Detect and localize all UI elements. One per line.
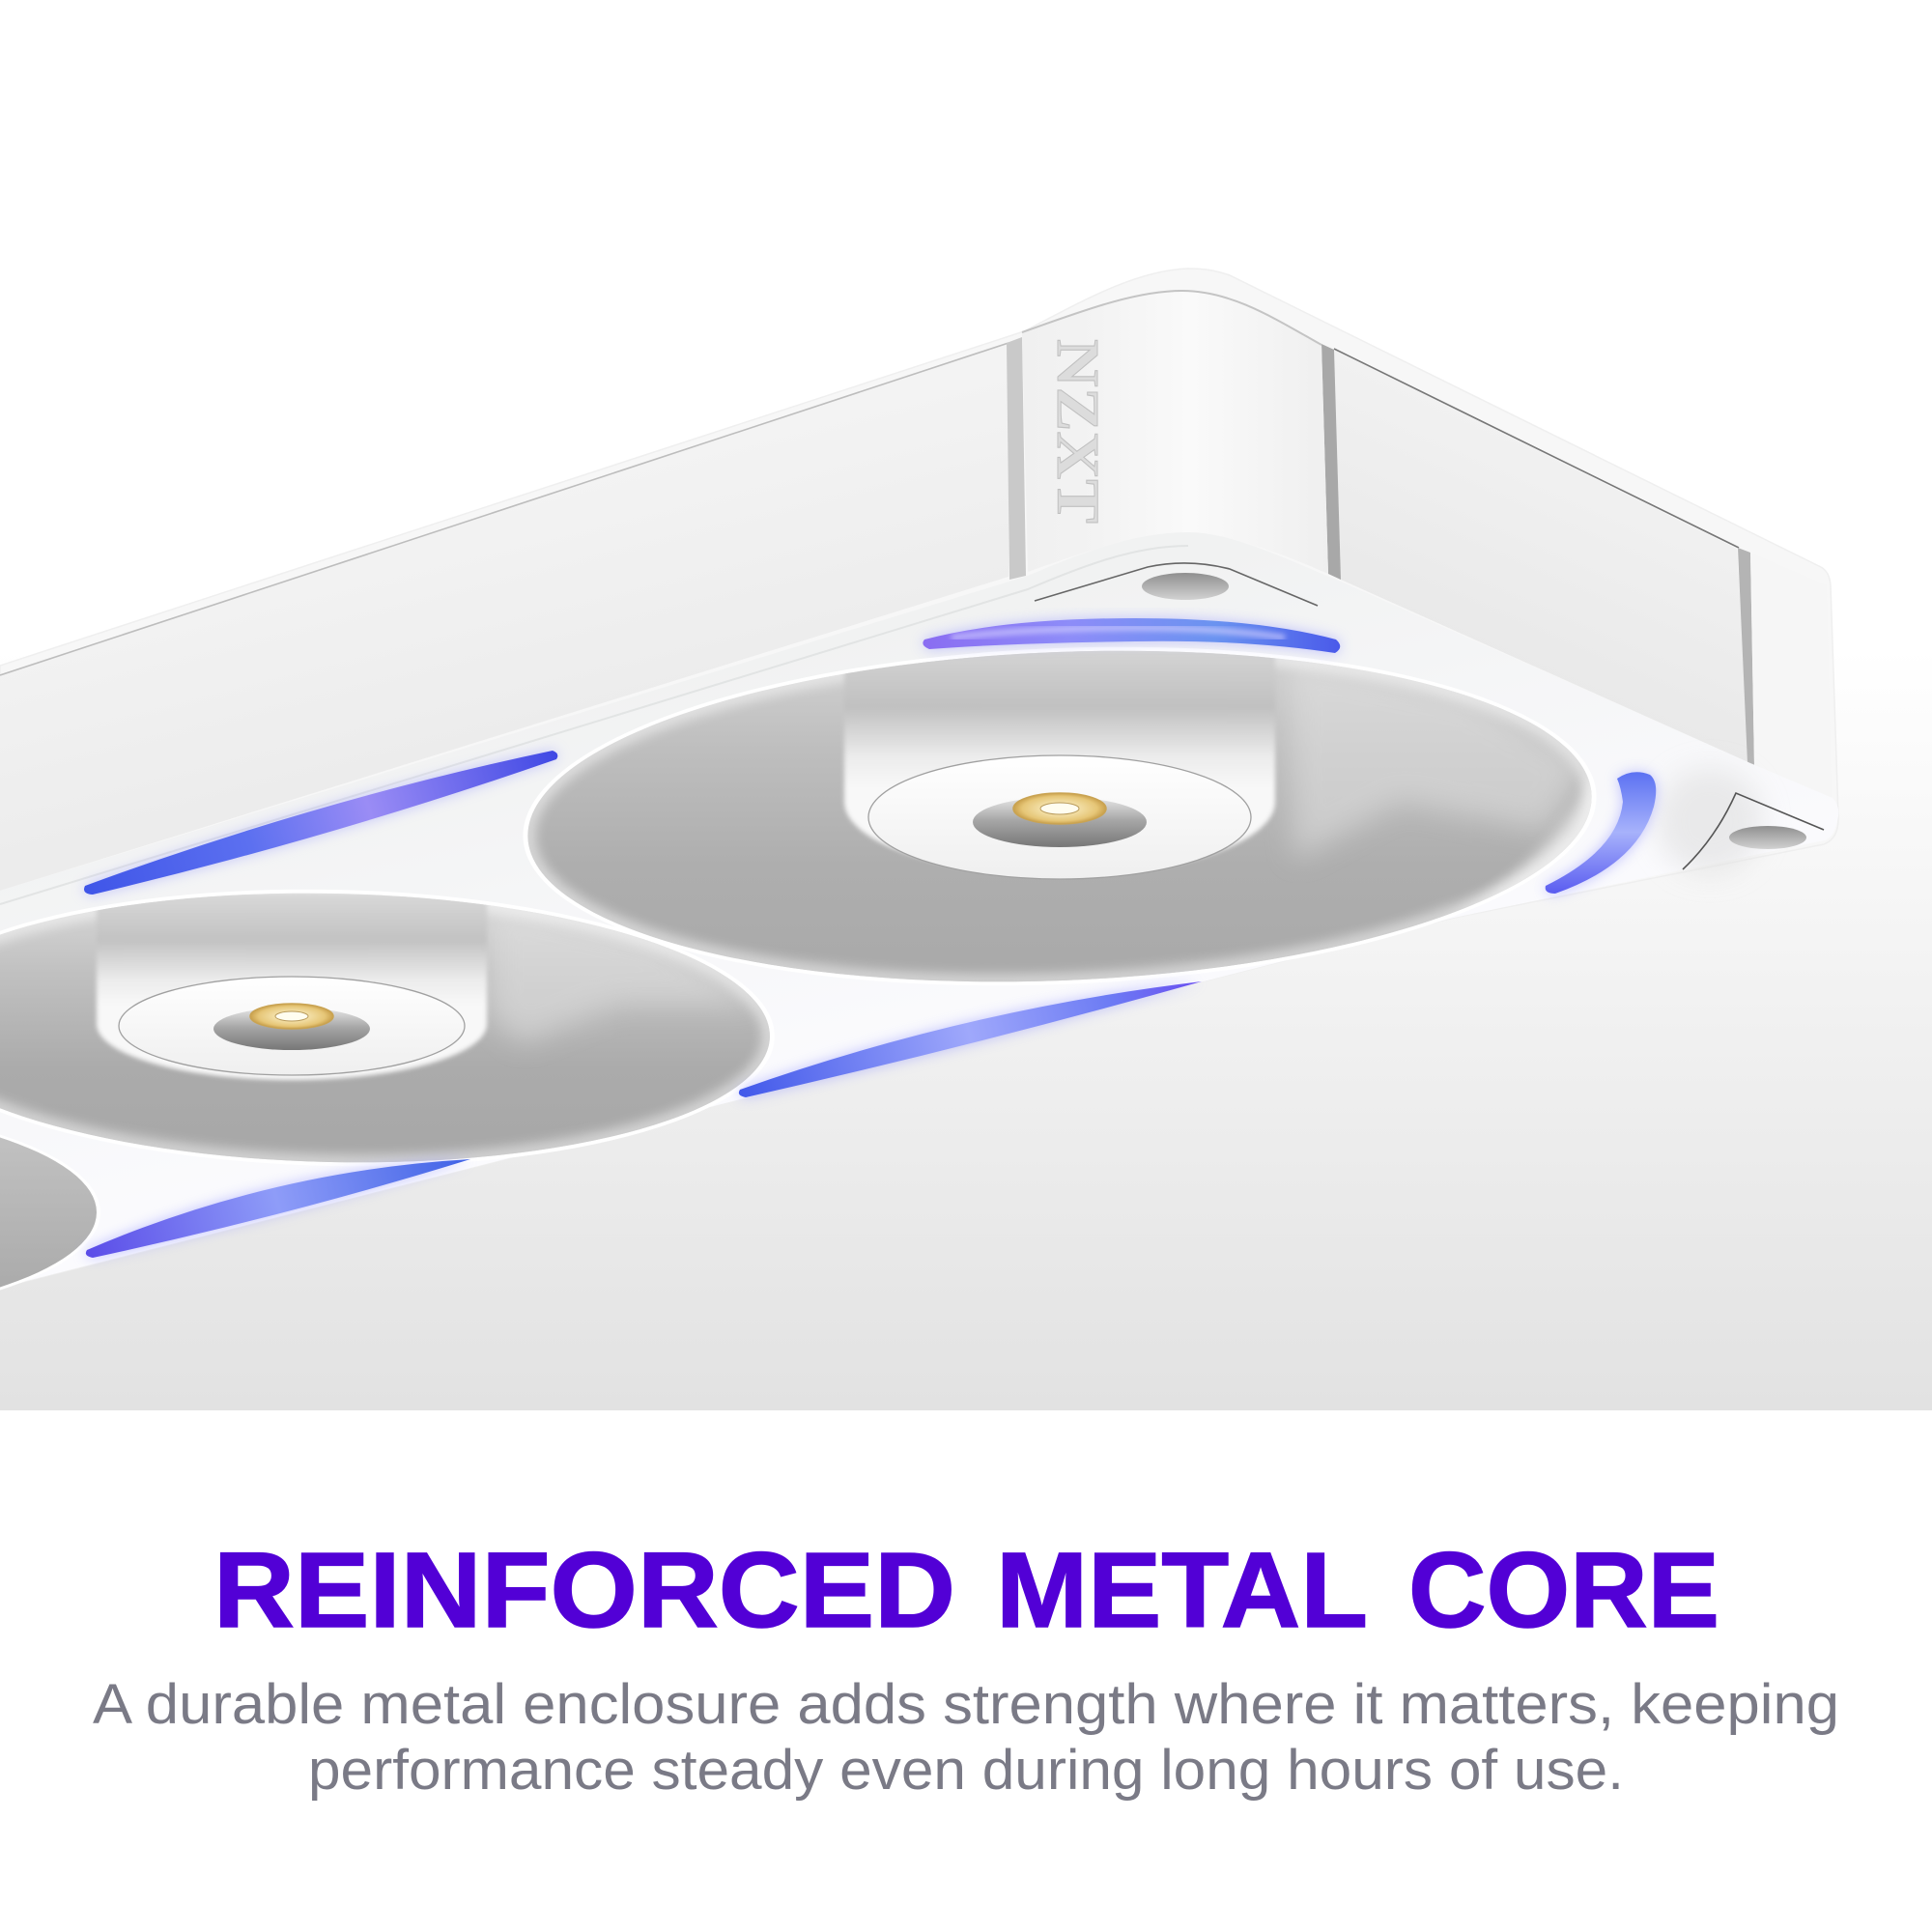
left side panel xyxy=(0,343,1009,891)
right seam xyxy=(1321,344,1341,580)
gold bearing xyxy=(1013,793,1106,824)
right panel top edge xyxy=(1334,349,1739,548)
LED strip: right arc xyxy=(1546,772,1656,894)
underside frame xyxy=(0,532,1838,1288)
gold bearing xyxy=(250,1004,333,1029)
end cap xyxy=(1750,553,1832,798)
title: METAL xyxy=(996,1531,1368,1650)
fan two rim xyxy=(0,880,778,1176)
top corner screw hole xyxy=(1142,573,1229,600)
fan two blades xyxy=(0,884,782,1174)
hub face xyxy=(119,977,465,1075)
top corner triangle outline xyxy=(1035,563,1318,606)
radiator body silhouette xyxy=(0,269,1838,1288)
title: REINFORCED xyxy=(213,1531,955,1650)
hub recess xyxy=(213,1008,370,1050)
hub face xyxy=(868,755,1251,879)
LED strip: top of fan one xyxy=(923,618,1340,653)
fan one blades xyxy=(527,651,1592,981)
description line one: A durable metal enclosure adds strength where it matters, keeping xyxy=(93,1673,1839,1736)
background gradient panel xyxy=(0,0,1932,1410)
end cap seam xyxy=(1738,548,1754,765)
right corner triangle outline xyxy=(1683,793,1824,869)
fan two xyxy=(0,880,782,1176)
right corner screw hole xyxy=(1729,826,1806,849)
wrap top edge xyxy=(1022,291,1321,345)
left panel top edge xyxy=(0,343,1009,675)
hub cylinder xyxy=(844,649,1275,875)
title xyxy=(213,1531,1719,1650)
NZXT logo: NZXT xyxy=(1044,339,1110,524)
fan three rim xyxy=(0,1101,100,1323)
LED strip: upper left xyxy=(84,751,557,895)
frame edge highlight line xyxy=(0,546,1188,904)
frame corner shading xyxy=(1657,768,1763,874)
fan one rim xyxy=(516,627,1604,1006)
description text xyxy=(93,1673,1839,1802)
center wrap with logo xyxy=(1022,291,1328,574)
fan three xyxy=(0,1101,100,1323)
description line two: performance steady even during long hours of use. xyxy=(308,1739,1624,1802)
left seam xyxy=(1007,337,1026,580)
radiator product xyxy=(0,269,1838,1323)
textured wrap band xyxy=(1022,291,1328,574)
hub recess xyxy=(973,797,1147,847)
LED strip: lower left xyxy=(86,1159,470,1258)
LED strip: bottom center xyxy=(739,981,1202,1097)
right side panel xyxy=(1334,350,1750,763)
fan one hub xyxy=(844,649,1275,879)
title: CORE xyxy=(1408,1531,1719,1650)
fan three blades xyxy=(0,1104,97,1321)
hub cylinder xyxy=(97,894,487,1080)
fan one xyxy=(524,647,1592,981)
fan two hub xyxy=(97,894,487,1080)
